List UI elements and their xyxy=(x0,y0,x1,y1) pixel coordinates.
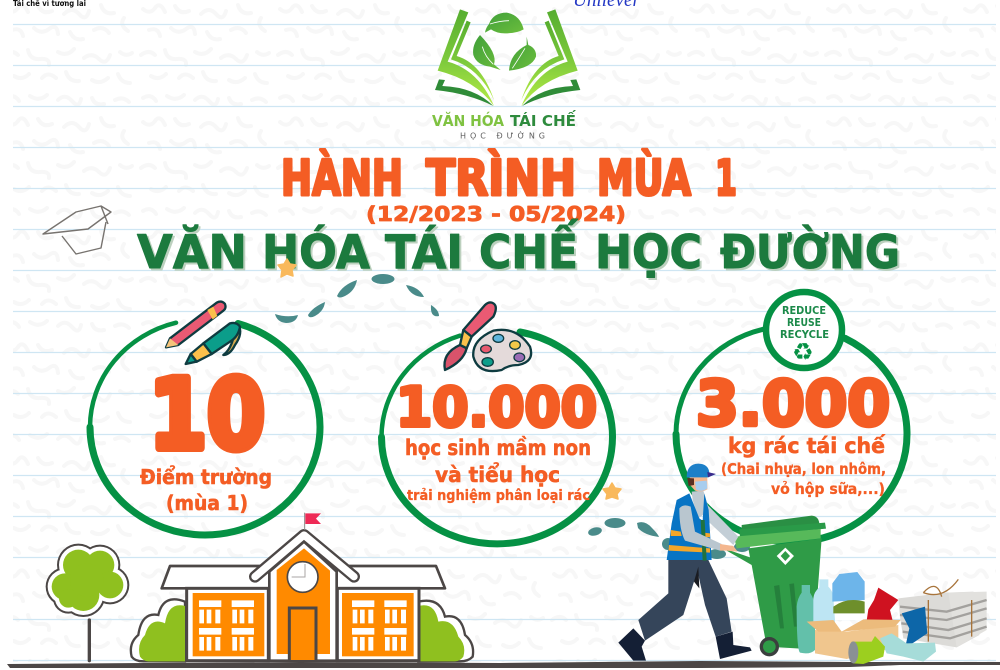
title xyxy=(281,148,737,207)
ground line xyxy=(7,661,1000,668)
cardboard box xyxy=(807,619,901,659)
date range: (12/2023 - 05/2024) xyxy=(366,202,626,226)
subtitle: HỌC xyxy=(595,225,702,279)
blue can xyxy=(902,607,927,648)
subtitle: VĂN xyxy=(137,224,247,279)
hand xyxy=(720,544,738,552)
badge text xyxy=(780,304,829,341)
icon: open book xyxy=(435,9,580,106)
title: TRÌNH xyxy=(426,148,576,207)
neck and face xyxy=(692,491,709,518)
badge text: RECYCLE xyxy=(780,328,829,341)
bottle blue xyxy=(813,579,835,623)
icon: recycling arrows: ♻ xyxy=(792,338,814,366)
title: MÙA xyxy=(597,148,691,207)
logo wordmark xyxy=(432,109,576,130)
left wing roof xyxy=(162,566,270,588)
red can xyxy=(867,588,898,621)
central roof xyxy=(255,535,354,577)
mask xyxy=(695,481,707,491)
label line 2: và tiểu học xyxy=(435,462,560,487)
subtitle xyxy=(137,219,900,279)
panel: recycling stat xyxy=(676,292,907,542)
logo wordmark: TÁI CHẾ xyxy=(510,109,576,130)
right wing xyxy=(337,588,419,661)
subtitle: ĐƯỜNG xyxy=(720,225,900,279)
icon: star left xyxy=(278,259,296,277)
illustration: school and trees xyxy=(46,513,473,661)
label: kg rác tái chế xyxy=(728,434,886,458)
tree xyxy=(46,544,129,661)
subtitle: TÁI xyxy=(385,225,463,279)
crushed plastic bottle xyxy=(880,633,936,662)
bush right xyxy=(418,601,473,661)
detail line 1: (Chai nhựa, lon nhôm, xyxy=(721,460,886,478)
wheelie bin xyxy=(727,516,826,655)
wheel xyxy=(761,639,777,655)
arm back xyxy=(703,500,738,545)
dashed arrow path bottom xyxy=(587,518,750,559)
crushed green can xyxy=(848,636,885,664)
illustration: worker with bin and recyclables xyxy=(618,464,987,664)
icon: recycling leaves xyxy=(473,13,536,71)
title: HÀNH xyxy=(281,148,403,207)
boots xyxy=(618,628,646,661)
trousers xyxy=(638,560,732,641)
label line 3: trải nghiệm phân loại rác xyxy=(407,488,590,504)
logo subtitle: HỌC ĐƯỜNG xyxy=(460,130,545,140)
arm front xyxy=(679,505,722,551)
door xyxy=(289,608,316,660)
icon: pencil xyxy=(166,302,226,347)
central tower xyxy=(269,542,337,661)
ring xyxy=(381,332,612,544)
bush left xyxy=(131,599,185,661)
cap xyxy=(687,464,715,477)
newspaper stack xyxy=(898,579,987,647)
big number: 3.000 xyxy=(696,367,890,440)
ring xyxy=(90,323,320,535)
bottle teal xyxy=(797,585,815,653)
icon: star right xyxy=(603,483,621,499)
badge: reduce reuse recycle xyxy=(766,292,842,368)
big number: 10.000 xyxy=(396,376,597,439)
icon: graduation cap sketch xyxy=(43,206,111,254)
worker xyxy=(618,464,752,661)
right wing roof xyxy=(337,566,445,588)
subtitle: CHẾ xyxy=(479,219,579,279)
flag xyxy=(305,513,321,530)
left wing xyxy=(187,588,268,661)
milk carton xyxy=(832,572,865,620)
sublabel: (mùa 1) xyxy=(166,491,248,515)
panel: schools stat xyxy=(90,302,320,535)
logo wordmark: VĂN HÓA xyxy=(432,111,504,130)
badge text: REUSE xyxy=(787,316,821,329)
clock xyxy=(287,562,318,592)
icon: marker xyxy=(186,323,240,364)
title: 1 xyxy=(715,150,737,207)
big number: 10 xyxy=(149,359,265,471)
detail line 2: vỏ hộp sữa,...) xyxy=(771,480,885,498)
label line 1: học sinh mầm non xyxy=(405,436,591,460)
subtitle: HÓA xyxy=(262,225,370,279)
safety vest xyxy=(667,493,712,560)
icon: paint palette xyxy=(473,330,531,371)
badge text: REDUCE xyxy=(782,304,826,317)
icon: paintbrush xyxy=(444,302,496,370)
label: Điểm trường xyxy=(140,465,272,489)
dashed arrow path top xyxy=(275,274,439,323)
logo xyxy=(432,9,580,141)
bin logo xyxy=(777,548,794,565)
panel: students stat xyxy=(381,302,612,544)
ring xyxy=(676,329,907,542)
